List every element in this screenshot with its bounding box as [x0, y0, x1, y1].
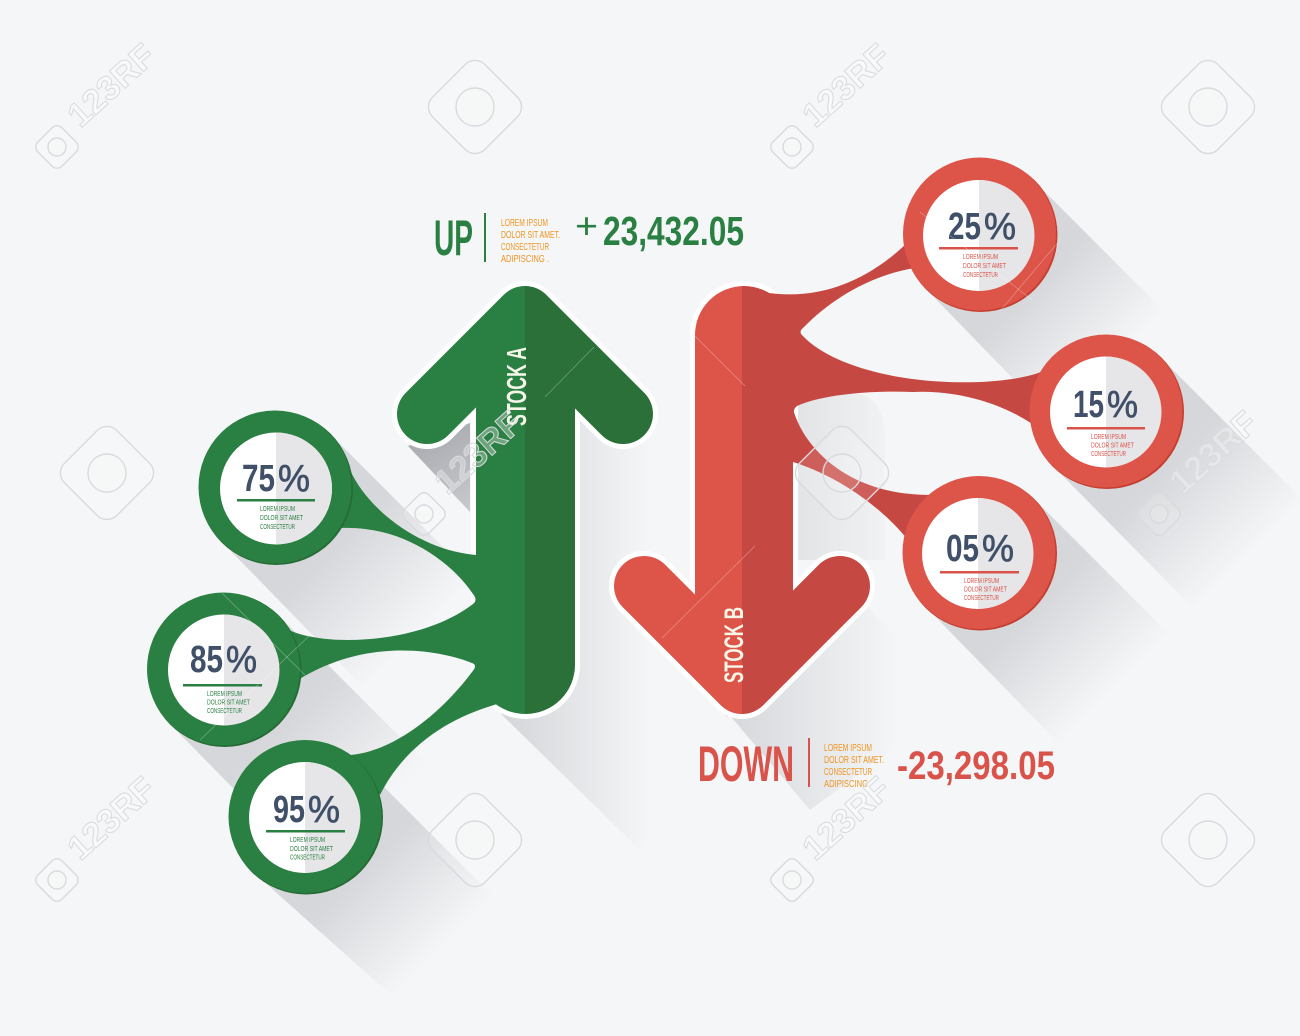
circle: 25%: %: [984, 206, 1016, 248]
circle: 95%: DOLOR SIT AMET: [290, 844, 333, 853]
circle: 15%: DOLOR SIT AMET: [1091, 440, 1134, 450]
watermarks: [33, 37, 1265, 904]
heading: DOWN with value: [698, 736, 1055, 792]
circle: 95%: %: [308, 789, 340, 831]
heading: DOWN with value: -23,298.05: [897, 744, 1055, 788]
watermarks: 123RF: [795, 770, 898, 868]
circle: 75%: 75: [242, 458, 275, 500]
circle: 75%: [198, 410, 353, 565]
circle: 85%: LOREM IPSUM: [207, 689, 242, 698]
heading: DOWN with value: CONSECTETUR: [824, 767, 872, 778]
watermarks: 123RF: [1162, 404, 1265, 502]
heading: UP with value: CONSECTETUR: [501, 242, 549, 253]
heading: DOWN with value: LOREM IPSUM: [824, 743, 872, 754]
circle: 15%: CONSECTETUR: [1091, 449, 1126, 458]
circle: 85%: DOLOR SIT AMET: [207, 698, 250, 706]
circle: 25%: [903, 158, 1058, 312]
heading: UP with value: LOREM IPSUM: [501, 218, 548, 229]
watermarks: 123RF: [427, 404, 530, 502]
circle: 15%: [1030, 334, 1184, 489]
circle: 05%: LOREM IPSUM: [964, 576, 999, 585]
circle: 75%: LOREM IPSUM: [260, 504, 295, 513]
label: Stock B: STOCK B: [719, 607, 749, 683]
circle: 95%: CONSECTETUR: [290, 852, 325, 862]
heading: UP with value: [434, 205, 744, 266]
heading: UP with value: UP: [434, 210, 473, 266]
circle: 75%: CONSECTETUR: [260, 522, 295, 531]
heading: UP with value: DOLOR SIT AMET.: [501, 230, 560, 241]
circle: 25%: DOLOR SIT AMET: [963, 261, 1006, 270]
arrow outline: [644, 286, 840, 684]
circle: 05%: 05: [946, 528, 979, 570]
branches to red circles: [762, 240, 1045, 540]
arrow outline: [427, 316, 623, 714]
label: Stock A: STOCK A: [501, 347, 532, 426]
shadows: long diagonal shadows: [170, 181, 1300, 1003]
arrow: Stock B (down, red): [644, 240, 1045, 684]
circle: 85%: CONSECTETUR: [207, 706, 242, 715]
branches to green circles: [285, 470, 500, 795]
heading: UP with value: 23,432.05: [603, 208, 744, 254]
watermarks: 123RF: [795, 37, 898, 135]
circle: 85%: 85: [190, 639, 223, 681]
heading: UP with value: ADIPISCING .: [501, 254, 549, 265]
circle: 95%: LOREM IPSUM: [290, 835, 325, 844]
heading: DOWN with value: DOLOR SIT AMET.: [824, 755, 884, 766]
heading: DOWN with value: ADIPISCING: [824, 779, 868, 790]
circle: 15%: 15: [1073, 384, 1104, 426]
watermarks: 123RF: [60, 770, 163, 868]
circle: 05%: DOLOR SIT AMET: [964, 584, 1007, 594]
circle: 75%: %: [278, 458, 310, 500]
circle: 15%: LOREM IPSUM: [1091, 432, 1126, 441]
circle: 95%: [228, 740, 383, 894]
heading: DOWN with value: DOWN: [698, 736, 794, 792]
circle: 95%: 95: [273, 789, 305, 831]
circle: 05%: CONSECTETUR: [964, 593, 999, 602]
circle: 05%: %: [982, 528, 1014, 570]
circle: 75%: DOLOR SIT AMET: [260, 513, 303, 522]
arrow: Stock A (up, green): [285, 316, 623, 795]
circle: 15%: %: [1107, 384, 1138, 426]
arrow body: [695, 286, 793, 660]
circle: 25%: 25: [948, 206, 981, 248]
circle: 25%: LOREM IPSUM: [963, 252, 998, 261]
watermarks: 123RF: [60, 37, 163, 135]
heading: UP with value: +: [575, 205, 598, 246]
circle: 85%: %: [226, 639, 257, 681]
circle: 85%: [147, 592, 302, 747]
circle: 05%: [902, 476, 1057, 630]
arrow body: [476, 340, 575, 714]
circle: 25%: CONSECTETUR: [963, 270, 998, 279]
